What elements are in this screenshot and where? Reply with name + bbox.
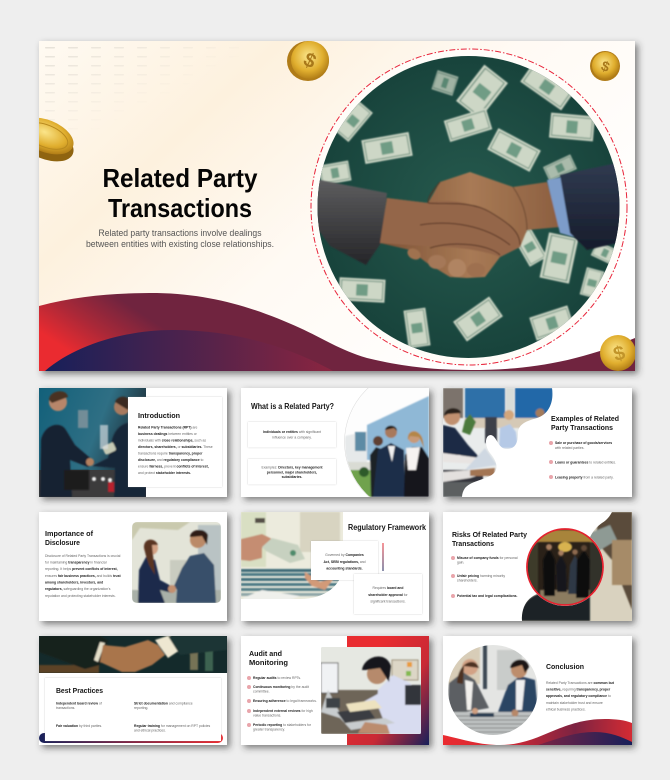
item: training: Regular training for management on RPT policies bbox=[134, 724, 211, 728]
item: documentation: reporting. bbox=[134, 706, 148, 710]
panel: examples slide bbox=[443, 388, 632, 500]
heading: Introduction bbox=[138, 411, 180, 420]
text block: transactions require transparency, proper bbox=[138, 452, 203, 456]
photo: businessmen in hotel lobby with red ring bbox=[525, 527, 605, 607]
bullet: unfair pricing: shareholders. bbox=[457, 578, 478, 582]
text block: ensure fairness, prevent conflicts of interest, bbox=[138, 464, 209, 468]
bullet: external reviews: value transactions. bbox=[253, 714, 281, 718]
text block: reporting. It helps prevent conflicts of interest, bbox=[45, 567, 118, 571]
heading bbox=[45, 529, 93, 547]
item: documentation: Strict documentation and compliance bbox=[134, 702, 193, 706]
bullet: sale or purchase bbox=[549, 441, 612, 450]
subtitle bbox=[86, 228, 274, 249]
bullet: adherence: Ensuring adherence to legal frameworks. bbox=[253, 699, 317, 703]
heading: Conclusion bbox=[546, 662, 584, 671]
photo: man working on laptop bbox=[321, 647, 421, 734]
heading: Transactions bbox=[452, 539, 494, 548]
card: governed by: Governed by Companies bbox=[325, 553, 364, 557]
bullet: periodic reporting: greater transparency. bbox=[253, 728, 285, 732]
icon: coin top right: $ bbox=[599, 57, 612, 75]
card bbox=[128, 397, 222, 487]
cuff bbox=[546, 176, 574, 238]
bullet: tax: Potential tax and legal complications. bbox=[457, 594, 518, 598]
bullet: external reviews bbox=[247, 709, 313, 718]
text block bbox=[138, 426, 213, 475]
text block: regulators, safeguarding the organization's bbox=[45, 587, 111, 591]
heading: Party Transactions bbox=[551, 423, 613, 432]
bullet: continuous monitoring: committee. bbox=[253, 690, 270, 694]
panel: conclusion slide bbox=[443, 636, 632, 745]
heading: Regulatory Framework bbox=[348, 523, 427, 532]
left sleeve bbox=[315, 179, 387, 265]
bullet: unfair pricing: Unfair pricing harming minority bbox=[457, 574, 505, 578]
item: documentation bbox=[134, 702, 193, 710]
bullet: leasing: Leasing property from a related party. bbox=[555, 476, 614, 480]
text block: ensures fair business practices, and builds trust bbox=[45, 574, 121, 578]
bullet: loans: Loans or guarantees to related entities. bbox=[555, 460, 616, 464]
title bbox=[102, 163, 258, 223]
item: board review bbox=[56, 702, 102, 710]
panel: importance of disclosure slide bbox=[39, 512, 227, 621]
heading: Examples of Related bbox=[551, 414, 619, 423]
bullet: periodic reporting: Periodic reporting to stakeholders for bbox=[253, 723, 312, 727]
panel: hero slide bbox=[13, 41, 636, 371]
title: Transactions bbox=[108, 193, 252, 223]
text block bbox=[45, 554, 121, 598]
photo: colleagues signing documents bbox=[446, 644, 540, 736]
photo: handshake with falling money bbox=[315, 54, 625, 360]
item: board review: transactions. bbox=[56, 706, 75, 710]
item: board review: Independent board review of bbox=[56, 702, 102, 706]
heading: Monitoring bbox=[249, 658, 288, 667]
dashed circle ring bbox=[311, 49, 627, 365]
icon: coin top right bbox=[590, 51, 620, 81]
photo: dark handshake banner bbox=[39, 635, 227, 673]
bullet: sale or purchase: with related parties. bbox=[555, 446, 584, 450]
accent bar bbox=[39, 733, 223, 743]
card: governed by: accounting standards. bbox=[326, 566, 363, 570]
text block bbox=[546, 681, 615, 712]
text block: approvals, and regulatory compliance to bbox=[546, 694, 611, 698]
icon: coin top centre: $ bbox=[300, 49, 319, 73]
text block: business dealings between entities or bbox=[138, 432, 198, 436]
card: examples: subsidiaries. bbox=[282, 475, 302, 479]
text block: maintain stakeholder trust and ensure bbox=[546, 701, 603, 705]
subtitle: between entities with existing close relationships. bbox=[86, 239, 274, 249]
hands bbox=[380, 172, 560, 278]
card: requires approval: Requires board and bbox=[373, 586, 403, 590]
panel: introduction slide bbox=[39, 388, 227, 497]
red wave bbox=[39, 293, 635, 371]
bullet: continuous monitoring bbox=[247, 685, 309, 694]
card: examples bbox=[248, 459, 336, 484]
panel: what is a related party slide bbox=[239, 386, 437, 505]
bullet: external reviews: Independent external reviews for high bbox=[253, 709, 313, 713]
card: governed by: Act, SEBI regulations, and bbox=[323, 560, 366, 564]
icon: coin bottom right bbox=[600, 335, 636, 371]
bullet: unfair pricing bbox=[451, 574, 505, 582]
card: requires approval bbox=[354, 574, 422, 614]
bullet: misuse: gain. bbox=[457, 560, 464, 564]
text block: among shareholders, investors, and bbox=[45, 580, 103, 584]
bullet: periodic reporting bbox=[247, 723, 312, 732]
bullet: misuse: Misuse of company funds for personal bbox=[457, 556, 518, 560]
photo: office meeting in blob shape bbox=[443, 388, 555, 500]
item: training: and ethical practices. bbox=[134, 728, 166, 732]
divider accent bbox=[382, 543, 384, 571]
text block: ethical business practices. bbox=[546, 708, 586, 712]
red gradient side panel bbox=[347, 636, 429, 745]
card: definition: Individuals or entities with significant bbox=[263, 430, 321, 434]
photo: three professionals in a circle crop bbox=[344, 388, 429, 497]
subtitle: Related party transactions involve dealings bbox=[98, 228, 262, 238]
panel: regulatory framework slide bbox=[241, 512, 429, 621]
heading bbox=[249, 649, 288, 667]
card bbox=[45, 678, 221, 741]
icon: coin top centre bbox=[287, 41, 329, 81]
heading bbox=[452, 530, 528, 548]
icon: coin left bbox=[39, 118, 74, 162]
text block: sensitive, requiring transparency, proper bbox=[546, 688, 611, 692]
text block: directors, shareholders, or subsidiaries. These bbox=[138, 445, 213, 449]
panel: audit and monitoring slide bbox=[241, 636, 429, 745]
photo: woman and man shaking hands bbox=[132, 522, 221, 603]
card: examples: Examples: Directors, key management bbox=[261, 466, 323, 470]
heading: Importance of bbox=[45, 529, 93, 538]
text block: for maintaining transparency in financial bbox=[45, 560, 107, 564]
text block: Disclosure of Related Party Transactions is crucial bbox=[45, 554, 121, 558]
photo: hands exchanging banknotes bbox=[241, 512, 344, 600]
heading: Risks Of Related Party bbox=[452, 530, 528, 539]
item: training bbox=[134, 724, 211, 732]
text block: Related Party Transactions (RPT) are bbox=[138, 426, 197, 430]
panel: best practices slide bbox=[39, 635, 227, 745]
bullet: continuous monitoring: Continuous monitoring by the audit bbox=[253, 685, 309, 689]
item: valuation: Fair valuation by third parties. bbox=[56, 724, 102, 728]
heading: Best Practices bbox=[56, 686, 103, 695]
bullet: regular audits: Regular audits to review RPTs. bbox=[253, 676, 301, 680]
photo: background handover bbox=[515, 512, 635, 622]
card: requires approval: shareholder approval for bbox=[368, 593, 409, 597]
icon: coin bottom right: $ bbox=[611, 342, 627, 366]
panel: risks slide bbox=[443, 512, 635, 622]
card: examples: personnel, major shareholders, bbox=[267, 470, 317, 474]
title: Related Party bbox=[102, 163, 258, 193]
text block: individuals with close relationships, such as bbox=[138, 438, 206, 442]
bottom waves bbox=[443, 719, 632, 745]
heading: What is a Related Party? bbox=[251, 402, 334, 411]
text block: reputation and protecting stakeholder interests. bbox=[45, 594, 116, 598]
card: definition bbox=[248, 422, 336, 448]
bullet: sale or purchase: Sale or purchase of goods/services bbox=[555, 441, 612, 445]
heading: Audit and bbox=[249, 649, 282, 658]
bullet: misuse bbox=[451, 556, 518, 564]
card: definition: influence over a company. bbox=[272, 436, 312, 440]
navy wave bbox=[45, 330, 333, 371]
text block: and protect stakeholder interests. bbox=[138, 471, 191, 475]
card: governed by bbox=[311, 541, 378, 580]
photo: two businessmen shaking hands bbox=[39, 388, 146, 497]
text block: disclosure, and regulatory compliance to bbox=[138, 458, 204, 462]
heading: Disclosure bbox=[45, 538, 80, 547]
right sleeve bbox=[560, 163, 625, 250]
heading bbox=[551, 414, 619, 432]
text block: Related Party Transactions are common but bbox=[546, 681, 615, 685]
card: requires approval: significant transactions. bbox=[370, 600, 406, 604]
